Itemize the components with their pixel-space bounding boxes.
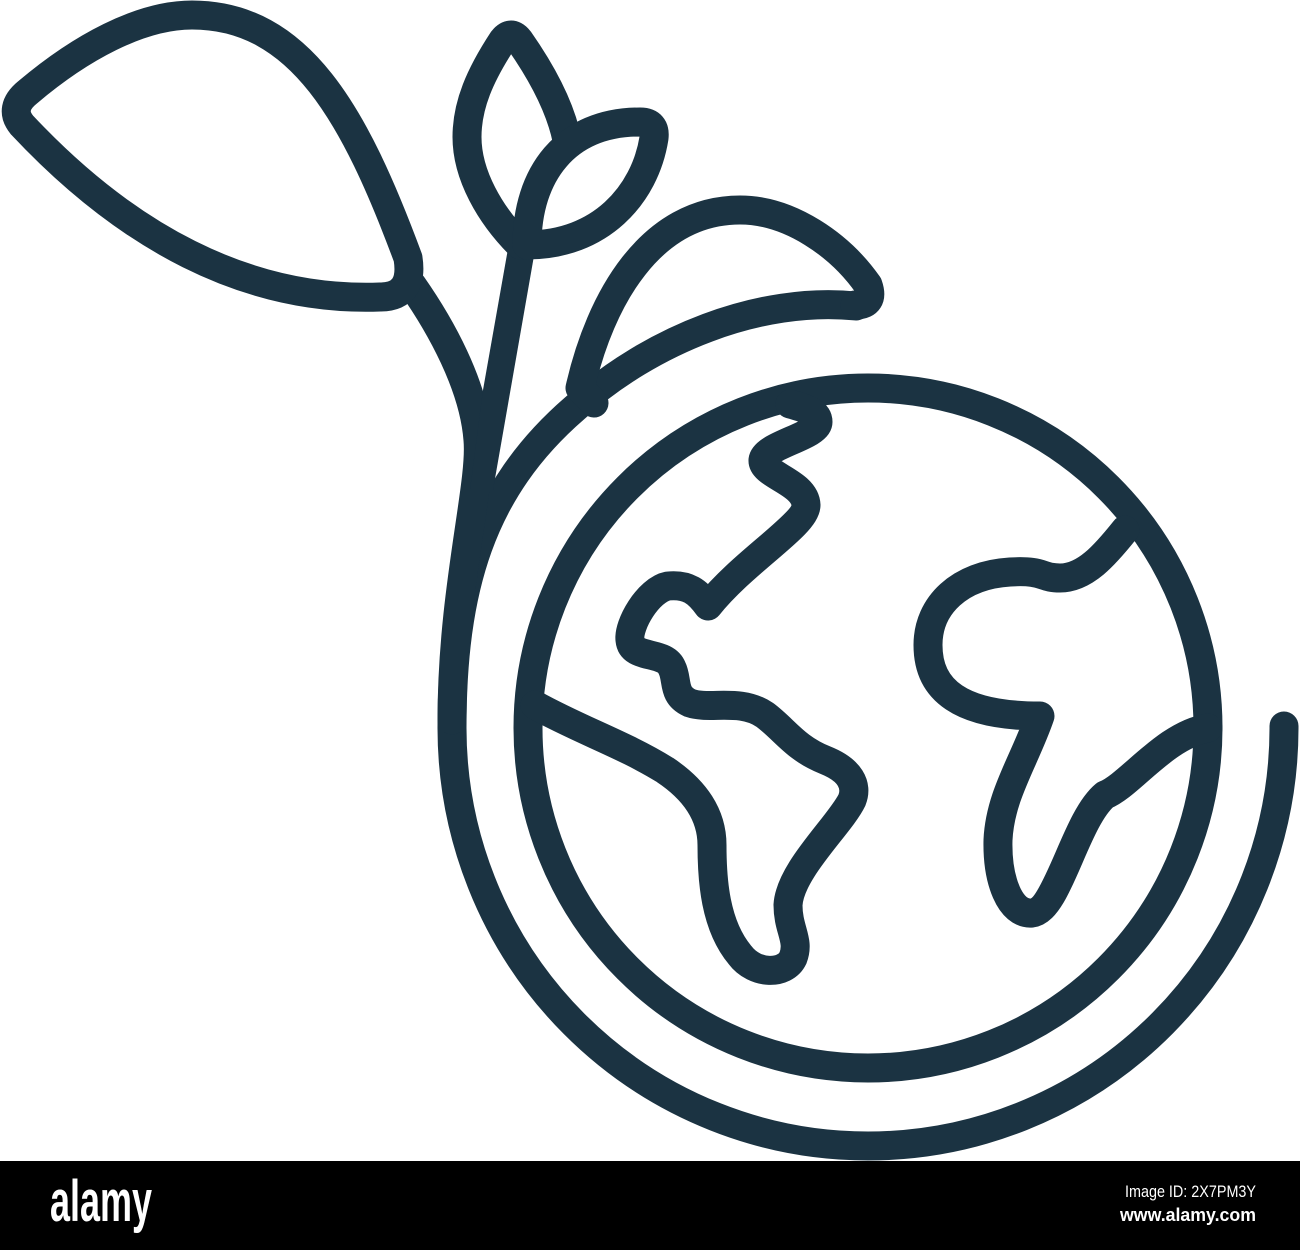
icon: top bud leaf — [467, 35, 567, 245]
icon: main stem — [412, 285, 478, 720]
footer image id: Image ID: 2X7PM3Y — [1125, 1182, 1256, 1201]
icon: africa and eurasia — [928, 530, 1208, 913]
icon: globe outline — [528, 388, 1208, 1068]
icon: side bud leaf — [527, 122, 654, 245]
footer bar — [0, 1161, 1300, 1250]
icon: north and south america — [535, 404, 854, 970]
icon: large leaf — [16, 15, 409, 297]
icon: middle stem — [470, 243, 535, 490]
footer logo: alamy — [50, 1169, 152, 1234]
icon: third leaf — [580, 210, 870, 403]
icon: outer swirl and stem — [452, 305, 1284, 1146]
footer website: www.alamy.com — [1119, 1205, 1256, 1225]
